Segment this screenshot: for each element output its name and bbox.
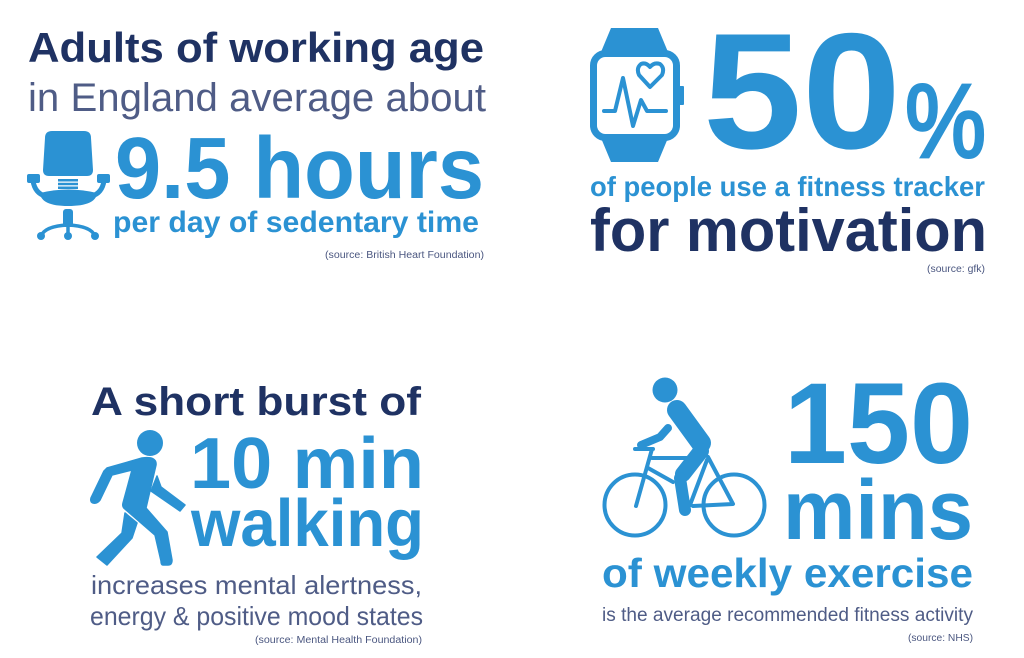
stat: mins: mins — [783, 463, 973, 557]
panel: walking — [90, 380, 424, 646]
stat: 50: 50 — [703, 0, 901, 183]
stat: 9.5 hours: 9.5 hours — [115, 120, 484, 217]
panel: weekly exercise — [602, 360, 973, 644]
icon: cyclist — [604, 378, 764, 536]
heading: a short burst of: A short burst of — [91, 380, 422, 424]
source: NHS: (source: NHS) — [908, 633, 973, 644]
text: increases mental alertness: increases mental alertness, — [91, 570, 422, 600]
text: of people use a fitness tracker: of people use a fitness tracker — [590, 171, 985, 202]
stat: walking: walking — [190, 486, 424, 561]
icon: office chair — [27, 131, 110, 240]
panel: sedentary time — [27, 24, 486, 261]
stat: 10 min: 10 min — [190, 424, 424, 504]
text: of weekly exercise: of weekly exercise — [602, 550, 973, 596]
source: gfk: (source: gfk) — [927, 264, 985, 275]
source: Mental Health Foundation: (source: Mental Health Foundation) — [255, 635, 422, 646]
icon: smartwatch — [594, 28, 684, 162]
heading: adults of working age: Adults of working age — [28, 24, 484, 71]
source: British Heart Foundation: (source: British Heart Foundation) — [325, 250, 484, 261]
heading: for motivation: for motivation — [590, 197, 987, 264]
text: recommended fitness activity: is the average recommended fitness activity — [602, 605, 973, 626]
panel: fitness tracker — [590, 0, 987, 275]
text: in England average about: in England average about — [28, 76, 486, 120]
stat: percent sign: % — [905, 64, 986, 180]
text: energy and positive mood states: energy & positive mood states — [90, 601, 423, 631]
stat: 150: 150 — [784, 360, 973, 488]
text: per day of sedentary time: per day of sedentary time — [113, 206, 479, 239]
icon: walking person — [91, 430, 185, 565]
